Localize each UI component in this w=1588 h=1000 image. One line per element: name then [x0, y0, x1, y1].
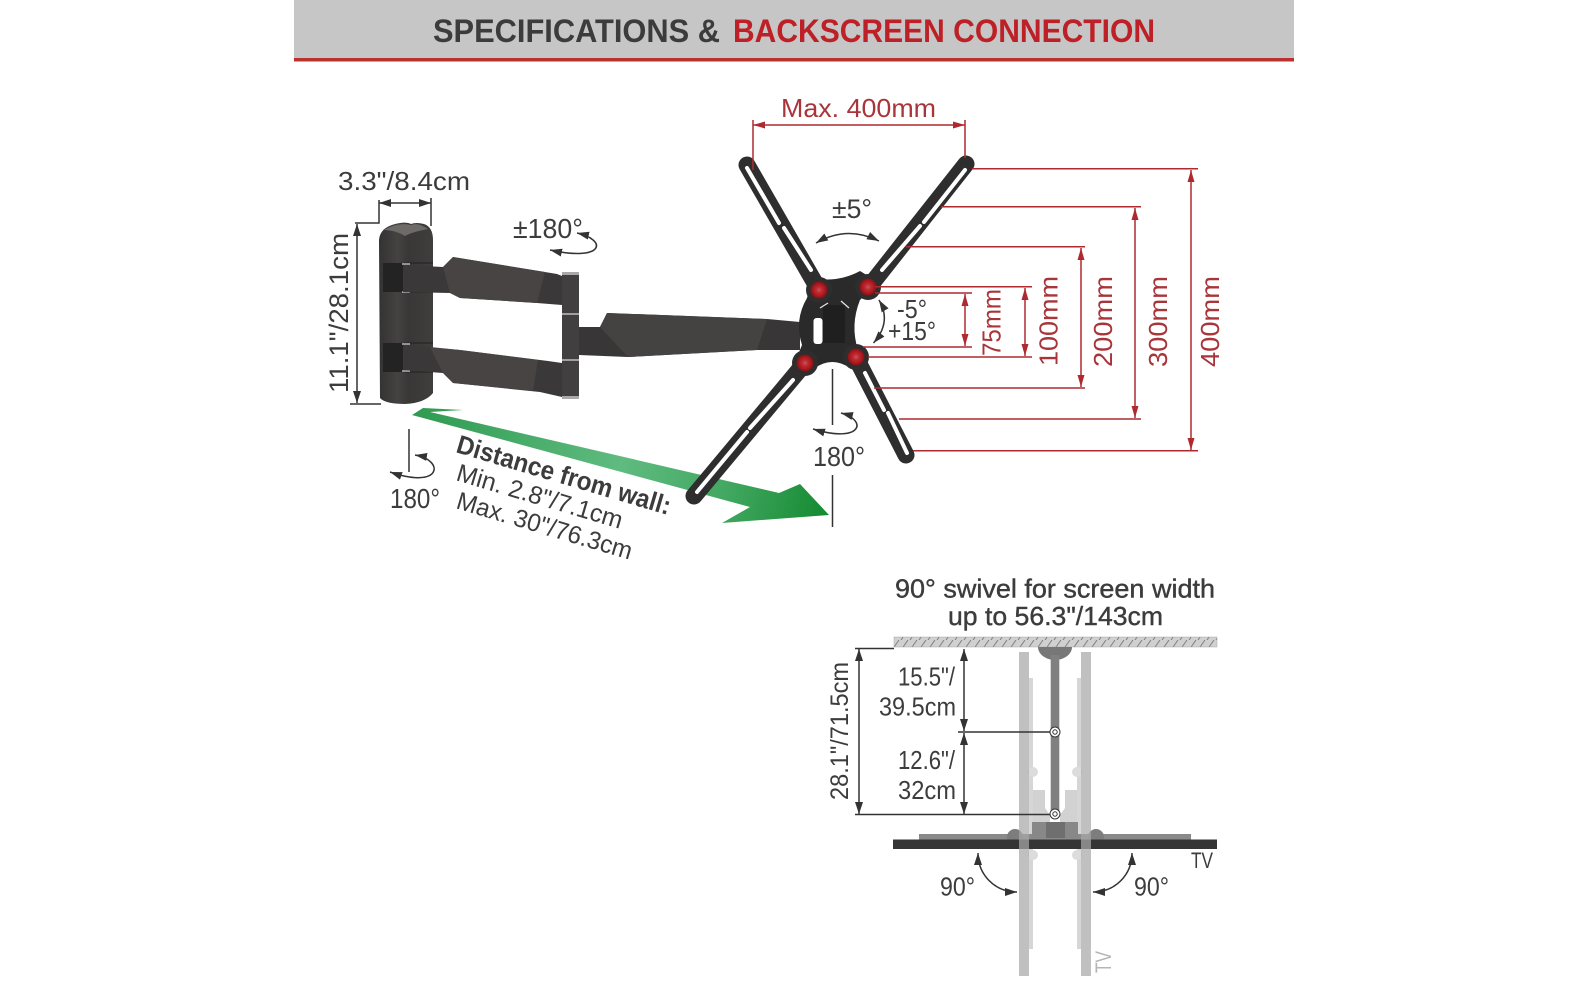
knuckle gaps: [383, 263, 433, 372]
lower arm: [403, 345, 562, 397]
upper arm length label: [879, 662, 956, 722]
upper arm: [403, 257, 562, 305]
depth dimension: [338, 166, 470, 226]
centre bracket: [795, 271, 878, 368]
lower arm length label: [898, 745, 956, 805]
arm rotation: [513, 213, 596, 254]
top view swivel diagram: [826, 637, 1217, 976]
front arm: [579, 313, 800, 357]
swivel heading: [895, 574, 1215, 631]
depth dimension: 3.3"/8.4cm: [338, 166, 470, 196]
left 90 degree swivel: [940, 853, 1017, 902]
wall plate dimensions: [324, 166, 596, 514]
pivot points: [1050, 727, 1060, 819]
left 90 degree swivel: 90°: [940, 872, 975, 902]
plate arms: [694, 164, 966, 496]
swivel heading: 90° swivel for screen width: [895, 574, 1215, 604]
swivel dimension lines: [855, 648, 1050, 814]
heading dark part: SPECIFICATIONS &: [433, 13, 720, 49]
rotation labels on plate: [813, 194, 936, 527]
distance from wall text: Distance from wall:: [453, 429, 675, 521]
hinge: [562, 273, 579, 398]
swung TV brackets: [1028, 678, 1082, 949]
header banner: [294, 0, 1294, 62]
arm rotation: ±180°: [513, 213, 583, 244]
width dimension: Max. 400mm: [781, 93, 936, 123]
wall: [894, 637, 1217, 647]
wall rotation 180: 180°: [390, 483, 440, 514]
arm in top view: [1038, 647, 1072, 815]
75mm dimension: 75mm: [976, 289, 1006, 356]
lower arm length label: 32cm: [898, 775, 956, 805]
200mm dimension: [874, 247, 1118, 388]
green distance arrow: [412, 408, 829, 523]
75mm dimension: [863, 289, 1006, 356]
width dimension: [753, 93, 965, 170]
height dimension: 11.1"/28.1cm: [324, 233, 354, 393]
right 90 degree swivel: 90°: [1134, 872, 1169, 902]
heading red part: BACKSCREEN CONNECTION: [733, 13, 1155, 49]
red VESA dimensions: [753, 93, 1225, 451]
300mm dimension: 300mm: [1143, 276, 1173, 367]
400mm dimension: 400mm: [1195, 276, 1225, 367]
distance from wall text: [453, 429, 675, 565]
100mm dimension: 100mm: [1034, 276, 1064, 366]
plate rotation 180: [813, 369, 865, 527]
wall rotation 180: [390, 429, 440, 514]
wall plate: [379, 223, 433, 404]
distance from wall text: Max. 30"/76.3cm: [453, 487, 636, 565]
swivel heading: up to 56.3"/143cm: [948, 601, 1163, 631]
total depth label: 28.1"/71.5cm: [826, 662, 854, 800]
TV label: TV: [1191, 848, 1213, 873]
TV plate and bar: [893, 822, 1217, 849]
red mounting pads: [792, 274, 881, 376]
tilt range: -5°: [897, 294, 927, 324]
200mm dimension: 200mm: [1088, 276, 1118, 367]
plate rotation 180: 180°: [813, 441, 865, 472]
wall mount arm: [379, 223, 800, 404]
upper arm length label: 39.5cm: [879, 692, 956, 722]
swivel 5 degrees: ±5°: [832, 194, 872, 224]
distance from wall text: Min. 2.8"/7.1cm: [453, 459, 626, 535]
swung TV panels: [1019, 652, 1091, 976]
tilt range: +15°: [888, 316, 936, 346]
upper arm length label: 15.5"/: [898, 662, 956, 692]
lower arm length label: 12.6"/: [898, 745, 956, 775]
right 90 degree swivel: [1093, 853, 1169, 902]
VESA plate: [694, 164, 966, 496]
300mm dimension: [899, 207, 1173, 419]
tilt range: [874, 294, 936, 346]
swivel 5 degrees: [816, 194, 879, 243]
400mm dimension: [913, 169, 1225, 451]
swung TV label: TV: [1091, 951, 1116, 973]
100mm dimension: [868, 276, 1064, 366]
